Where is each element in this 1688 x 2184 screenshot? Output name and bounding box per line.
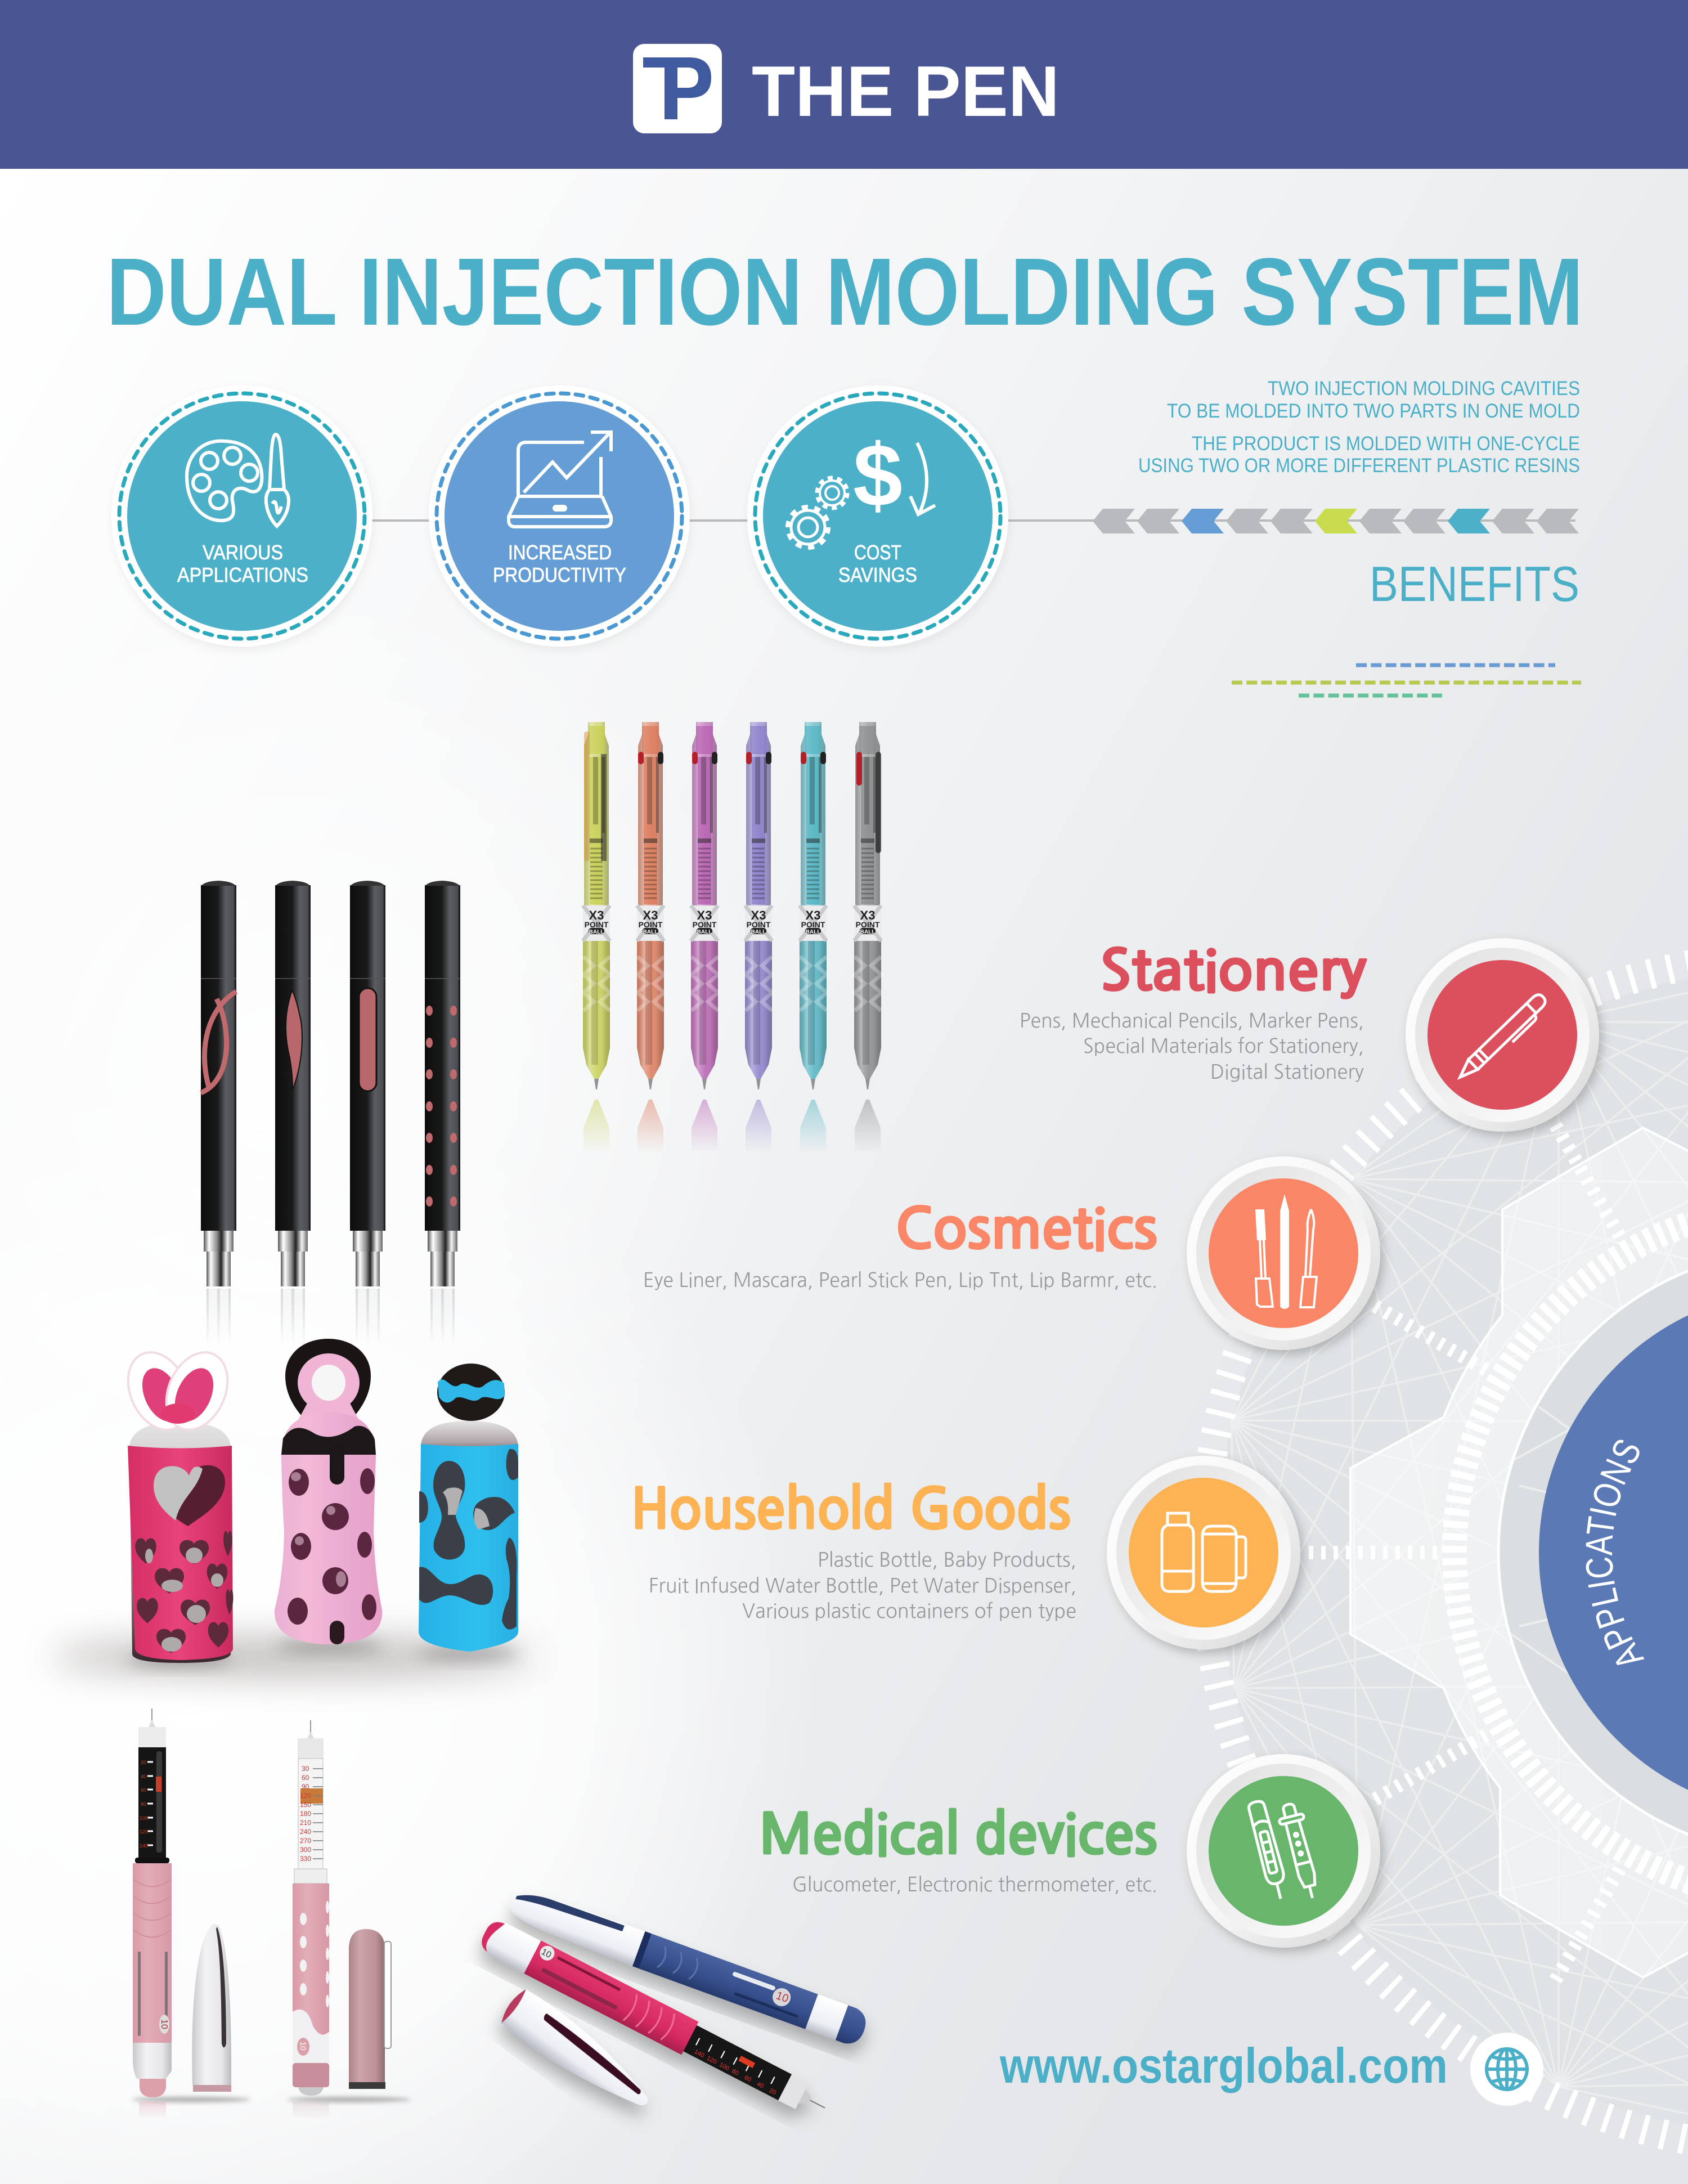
pen body: 140 bbox=[140, 1843, 148, 1849]
product: magenta insulin pen: 10 bbox=[540, 1947, 553, 1960]
pen 1 bbox=[201, 881, 236, 1345]
bottle: blue with organic cutouts bbox=[419, 1364, 518, 1652]
shadow bbox=[287, 2097, 411, 2102]
pen body: 90 bbox=[302, 1783, 309, 1791]
product: magenta insulin pen: 60 bbox=[743, 2074, 752, 2083]
pen body: 80 bbox=[141, 1801, 146, 1807]
shadow bbox=[132, 2097, 250, 2102]
product: colored ballpoint pens bbox=[583, 722, 881, 1152]
description bbox=[1020, 1011, 1364, 1082]
pen body bbox=[293, 1720, 329, 2096]
icon: laptop with rising arrow bbox=[509, 432, 611, 527]
benefit: cost savings bbox=[747, 385, 1008, 647]
pen body: 240 bbox=[300, 1828, 311, 1836]
icon button bbox=[1406, 938, 1599, 1132]
floor shadow bbox=[51, 1638, 535, 1676]
benefit: various applications bbox=[111, 385, 372, 647]
pen body: 100 bbox=[140, 1815, 148, 1821]
product: upright insulin pen, clear scale bbox=[287, 1720, 411, 2119]
pen: orange bbox=[637, 722, 664, 1152]
description: Glucometer, Electronic thermometer, etc. bbox=[792, 1875, 1157, 1895]
benefits description text: TWO INJECTION MOLDING CAVITIES bbox=[1268, 378, 1580, 400]
icon button bbox=[1187, 1754, 1380, 1948]
label bbox=[838, 541, 917, 586]
label: VARIOUS bbox=[203, 541, 283, 564]
benefits description text bbox=[1138, 378, 1580, 477]
product: water bottles bbox=[51, 1339, 535, 1676]
applications hub disc bbox=[1539, 1315, 1688, 1790]
pen: lime: X3 bbox=[589, 908, 604, 922]
product: magenta insulin pen: 40 bbox=[756, 2080, 765, 2090]
label bbox=[493, 541, 626, 586]
gear graphic with web lines and tick rings bbox=[1204, 954, 1688, 2151]
label: COST bbox=[854, 541, 901, 564]
icon: palette and brush bbox=[187, 434, 289, 526]
pen body: 60 bbox=[302, 1774, 309, 1782]
product: navy insulin pen: 10 bbox=[774, 1989, 790, 2006]
decorative dash rows bbox=[1232, 665, 1581, 696]
brand name: THE PEN bbox=[752, 51, 1060, 131]
product: magenta insulin pen: 100 bbox=[718, 2061, 730, 2072]
icon: bottle and mug bbox=[1162, 1513, 1246, 1591]
benefits description text: TO BE MOLDED INTO TWO PARTS IN ONE MOLD bbox=[1167, 400, 1580, 422]
pen: orange: BALL bbox=[643, 929, 658, 935]
pen body: 40 bbox=[141, 1774, 146, 1779]
pen: violet: X3 bbox=[751, 908, 766, 922]
pen: grey bbox=[854, 722, 881, 1152]
website link: www.ostarglobal.com bbox=[999, 2038, 1448, 2093]
pen 3 bbox=[350, 881, 385, 1345]
product: magenta insulin pen: 140 bbox=[693, 2048, 706, 2059]
description: Various plastic containers of pen type bbox=[742, 1601, 1076, 1621]
reflection bbox=[139, 2102, 166, 2115]
logo mark bbox=[633, 44, 722, 133]
pen: teal: POINT bbox=[801, 920, 825, 929]
icon button bbox=[1187, 1156, 1380, 1350]
pen: lime: BALL bbox=[589, 929, 604, 935]
header bar bbox=[0, 0, 1688, 169]
product: magenta insulin pen bbox=[477, 1916, 833, 2124]
heading: Stationery bbox=[1100, 944, 1367, 998]
description bbox=[649, 1550, 1076, 1621]
pen: purple: X3 bbox=[697, 908, 712, 922]
pen body: 120 bbox=[140, 1829, 148, 1835]
label bbox=[177, 541, 308, 586]
benefits heading: BENEFITS bbox=[1370, 556, 1579, 612]
pen body: 20 bbox=[141, 1760, 146, 1765]
icon button bbox=[1107, 1456, 1300, 1649]
heading: Household Goods bbox=[631, 1482, 1071, 1537]
icon: dollar, gears and falling arrow bbox=[788, 426, 935, 548]
cap bbox=[349, 1929, 391, 2089]
bottle: light pink with ring handle bbox=[275, 1339, 382, 1644]
product: white pen cap bbox=[497, 1985, 660, 2121]
label: APPLICATIONS bbox=[177, 563, 308, 586]
icon: dollar, gears and falling arrow: $ bbox=[853, 426, 903, 525]
application: cosmetics bbox=[643, 1156, 1380, 1350]
product: magenta insulin pen: 80 bbox=[730, 2068, 740, 2077]
application: medical devices bbox=[759, 1754, 1380, 1948]
pen: orange: X3 bbox=[643, 908, 658, 922]
pen: orange: POINT bbox=[639, 920, 663, 929]
heading: Medical devices bbox=[759, 1808, 1157, 1862]
pen: purple bbox=[691, 722, 718, 1152]
pen: violet: POINT bbox=[747, 920, 771, 929]
label: INCREASED bbox=[508, 541, 612, 564]
label: SAVINGS bbox=[838, 563, 917, 586]
pen 4 bbox=[425, 881, 460, 1345]
product: black cosmetic pens bbox=[201, 881, 460, 1345]
pen body: 180 bbox=[300, 1810, 311, 1818]
pen: grey: X3 bbox=[860, 908, 875, 922]
pen: teal: BALL bbox=[806, 929, 820, 935]
icon: globe bbox=[1470, 2033, 1543, 2106]
pen 2 bbox=[275, 881, 311, 1345]
label: PRODUCTIVITY bbox=[493, 563, 626, 586]
description: Eye Liner, Mascara, Pearl Stick Pen, Lip Tnt, Lip Barmr, etc. bbox=[643, 1271, 1157, 1290]
icon: pen bbox=[1456, 992, 1551, 1085]
bottle: pink hearts with bunny ears bbox=[116, 1343, 239, 1663]
pen: purple: POINT bbox=[693, 920, 717, 929]
pen body: 10 bbox=[299, 2042, 308, 2051]
pen: purple: BALL bbox=[697, 929, 712, 935]
chevron strip bbox=[1093, 509, 1579, 533]
pen body: 300 bbox=[300, 1846, 311, 1854]
pen: grey: BALL bbox=[860, 929, 875, 935]
pen: violet: BALL bbox=[751, 929, 766, 935]
pen: lime bbox=[583, 722, 610, 1152]
pen body: 10 bbox=[159, 2019, 169, 2029]
pen body: 150 bbox=[300, 1801, 311, 1809]
reflection bbox=[293, 2102, 329, 2113]
pen: grey: POINT bbox=[856, 920, 880, 929]
benefits description text: THE PRODUCT IS MOLDED WITH ONE-CYCLE bbox=[1192, 433, 1580, 455]
product: upright insulin pen, pink with black scale bbox=[132, 1708, 250, 2119]
pen body: 330 bbox=[300, 1855, 311, 1863]
application: stationery bbox=[1020, 938, 1599, 1132]
applications hub disc: APPLICATIONS bbox=[1586, 1439, 1644, 1665]
cap bbox=[192, 1924, 231, 2092]
pen: teal: X3 bbox=[806, 908, 820, 922]
pen body: 60 bbox=[141, 1787, 146, 1793]
description: Pens, Mechanical Pencils, Marker Pens, bbox=[1020, 1011, 1364, 1031]
benefit: increased productivity bbox=[429, 385, 690, 647]
icon: medical pens bbox=[1247, 1800, 1323, 1902]
description: Digital Stationery bbox=[1210, 1062, 1364, 1082]
benefits description text: USING TWO OR MORE DIFFERENT PLASTIC RESINS bbox=[1138, 455, 1580, 477]
pen: lime: POINT bbox=[585, 920, 609, 929]
pen body: 30 bbox=[302, 1765, 309, 1773]
application: household goods bbox=[631, 1456, 1300, 1649]
product: magenta insulin pen: 20 bbox=[768, 2087, 777, 2096]
description: Special Materials for Stationery, bbox=[1083, 1036, 1364, 1056]
description: Fruit Infused Water Bottle, Pet Water Dispenser, bbox=[649, 1576, 1076, 1596]
pen body bbox=[133, 1708, 172, 2097]
pen body: 210 bbox=[300, 1819, 311, 1827]
product: magenta insulin pen: 120 bbox=[706, 2055, 718, 2066]
description: Plastic Bottle, Baby Products, bbox=[818, 1550, 1076, 1570]
product: navy insulin pen bbox=[505, 1885, 870, 2048]
pen body: 270 bbox=[300, 1837, 311, 1845]
pen: violet bbox=[745, 722, 772, 1152]
benefit connector lines bbox=[371, 519, 1575, 522]
icon: mascara, liner, lip gloss bbox=[1255, 1194, 1317, 1309]
heading: Cosmetics bbox=[895, 1202, 1157, 1257]
pen body: 120 bbox=[300, 1792, 311, 1800]
pen: teal bbox=[800, 722, 827, 1152]
